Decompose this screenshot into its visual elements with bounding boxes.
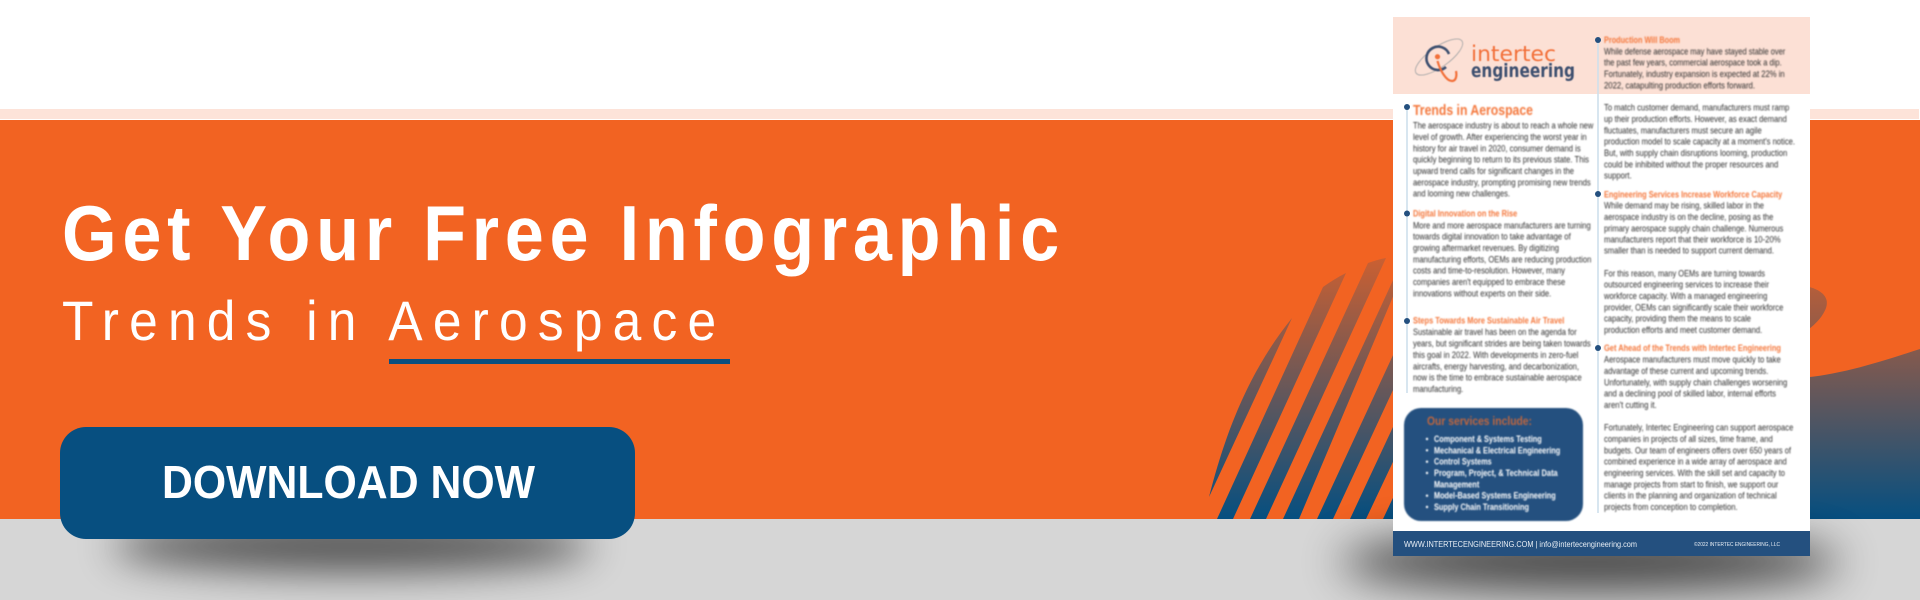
intertec engineering logo: engineering: [1471, 60, 1575, 82]
section: production will boom: the past few years, commercial aerospace took a dip.: [1604, 58, 1782, 68]
section: digital innovation: companies aren't equipped to embrace these: [1413, 277, 1565, 287]
section: engineering services: manufacturers report that their workforce is 10-20%: [1604, 234, 1781, 244]
section: digital innovation: growing aftermarket revenues. By digitizing: [1413, 243, 1559, 253]
section: get ahead: Get Ahead of the Trends with Intertec Engineering: [1604, 343, 1781, 353]
intro paragraph: quickly beginning to return to its previous state. This: [1413, 155, 1589, 165]
section: production will boom: Fortunately, industry expansion is expected at 22% in: [1604, 69, 1785, 79]
services callout box: Supply Chain Transitioning: [1434, 502, 1529, 512]
right side wave graphic: [1800, 285, 1920, 519]
section: sustainable air travel: years, but significant strides are being taken towards: [1413, 338, 1591, 348]
production paragraph: production model to scale capacity at a moment's notice.: [1604, 137, 1795, 147]
intro paragraph: [1413, 121, 1594, 199]
subtitle: Trends in Aerospace: [62, 290, 716, 352]
production paragraph: To match customer demand, manufacturers must ramp: [1604, 103, 1789, 113]
workforce paragraph: [1603, 268, 1783, 335]
download button: [60, 427, 635, 539]
services callout box: Control Systems: [1434, 457, 1492, 467]
document drop shadow: [1340, 534, 1840, 590]
section: get ahead: advantage of these current and upcoming trends.: [1604, 366, 1768, 376]
closing paragraph: engineering services. With the skill set and capacity to: [1604, 468, 1785, 478]
section: get ahead: and a declining pool of skilled labor, internal efforts: [1604, 389, 1776, 399]
intertec engineering logo: [1410, 33, 1575, 82]
closing paragraph: Fortunately, Intertec Engineering can support aerospace: [1604, 423, 1793, 433]
document heading: Trends in Aerospace: [1413, 103, 1533, 119]
intro paragraph: history for air travel in 2020, consumer demand is: [1413, 143, 1581, 153]
services callout box: Program, Project, & Technical Data: [1434, 468, 1559, 478]
production paragraph: could be inhibited without the proper resources and: [1604, 159, 1778, 169]
section: engineering services: primary aerospace supply chain challenge. Numerous: [1604, 223, 1784, 233]
intertec engineering logo: intertec: [1471, 42, 1556, 66]
intro paragraph: aerospace industry, prompting promising new trends: [1413, 177, 1591, 187]
right column timeline: [1595, 37, 1601, 513]
section: production will boom: While defense aerospace may have stayed stable over: [1604, 46, 1785, 56]
production paragraph: up their production efforts. However, as exact demand: [1604, 114, 1787, 124]
services callout box: [1404, 408, 1583, 521]
section: sustainable air travel: manufacturing.: [1413, 384, 1463, 394]
left column timeline: [1404, 104, 1410, 393]
section: sustainable air travel: Sustainable air travel has been on the agenda for: [1413, 327, 1577, 337]
section: production will boom: 2022, catapulting production efforts forward.: [1604, 80, 1755, 90]
workforce paragraph: For this reason, many OEMs are turning towards: [1604, 268, 1765, 278]
intro paragraph: and looming new challenges.: [1413, 189, 1510, 199]
closing paragraph: projects from conception to completion.: [1604, 502, 1738, 512]
closing paragraph: companies in projects of all sizes, time frame, and: [1604, 434, 1773, 444]
section: engineering services: aerospace industry is on the decline, posing as the: [1604, 212, 1773, 222]
section: production will boom: [1604, 35, 1785, 90]
closing paragraph: combined experience in a wide array of aerospace and: [1604, 457, 1787, 467]
section: get ahead: [1604, 343, 1787, 410]
document footer bar: [1393, 531, 1810, 556]
section: engineering services: [1604, 189, 1784, 256]
section: get ahead: Aerospace manufacturers must move quickly to take: [1604, 355, 1781, 365]
intro paragraph: level of growth. After experiencing the worst year in: [1413, 132, 1587, 142]
closing paragraph: clients in the planning and organization of technical: [1604, 491, 1777, 501]
section: get ahead: Unfortunately, with supply chain challenges worsening: [1604, 377, 1787, 387]
document footer bar: ©2022 INTERTEC ENGINEERING, LLC: [1694, 541, 1780, 548]
orange banner background: [0, 120, 1920, 519]
section: engineering services: smaller than is needed to support current demand.: [1604, 246, 1774, 256]
section: digital innovation: innovations without experts on their side.: [1413, 288, 1551, 298]
services callout box: Our services include:: [1427, 414, 1532, 428]
workforce paragraph: outsourced engineering services to increase their: [1604, 280, 1769, 290]
services callout box: Management: [1434, 479, 1479, 489]
production paragraph: [1604, 103, 1795, 181]
section: production will boom: Production Will Boom: [1604, 35, 1680, 45]
intro paragraph: upward trend calls for significant changes in the: [1413, 166, 1574, 176]
document footer bar: WWW.INTERTECENGINEERING.COM | info@intertecengineering.com: [1404, 539, 1637, 549]
diagonal stripe graphic: [1209, 258, 1400, 519]
section: engineering services: While demand may be rising, skilled labor in the: [1604, 201, 1764, 211]
intro paragraph: The aerospace industry is about to reach a whole new: [1413, 121, 1594, 131]
workforce paragraph: workforce capacity. With a managed engineering: [1603, 291, 1767, 301]
infographic document preview: [1393, 17, 1810, 556]
closing paragraph: [1604, 423, 1793, 512]
section: digital innovation: Digital Innovation on the Rise: [1413, 209, 1517, 219]
services callout box: Component & Systems Testing: [1434, 434, 1542, 444]
button drop shadow: [112, 520, 592, 572]
production paragraph: fluctuates, manufacturers must secure an agile: [1604, 125, 1762, 135]
section: sustainable air travel: this goal in 2022. With developments in zero-fuel: [1413, 350, 1578, 360]
workforce paragraph: production efforts and meet customer demand.: [1604, 325, 1762, 335]
section: sustainable air travel: Steps Towards More Sustainable Air Travel: [1413, 316, 1564, 326]
grey floor strip: [0, 519, 1920, 600]
title: Get Your Free Infographic: [62, 190, 1059, 277]
section: digital innovation: manufacturing efforts, OEMs are reducing production: [1413, 254, 1591, 264]
section: sustainable air travel: now is the time to embrace sustainable aerospace: [1413, 373, 1582, 383]
section: sustainable air travel: [1413, 316, 1591, 394]
section: engineering services: Engineering Services Increase Workforce Capacity: [1604, 189, 1783, 199]
closing paragraph: budgets. Our team of engineers offers over 650 years of: [1604, 445, 1791, 455]
subtitle underline: [389, 359, 730, 364]
closing paragraph: manage projects from start to finish, we support our: [1604, 479, 1778, 489]
section: sustainable air travel: aircrafts, energy harvesting, and decarbonization,: [1413, 361, 1579, 371]
workforce paragraph: provider, OEMs can significantly scale their workforce: [1604, 302, 1783, 312]
document header band: [1393, 17, 1810, 94]
pale band above the banner: [0, 109, 1919, 119]
services callout box: Mechanical & Electrical Engineering: [1434, 445, 1560, 455]
section: digital innovation: [1413, 209, 1591, 298]
production paragraph: But, with supply chain disruptions looming, production: [1604, 148, 1787, 158]
download button: DOWNLOAD NOW: [162, 456, 536, 508]
section: digital innovation: towards digital innovation to take advantage of: [1413, 232, 1571, 242]
section: digital innovation: costs and time-to-resolution. However, many: [1413, 266, 1565, 276]
production paragraph: support.: [1604, 171, 1632, 181]
workforce paragraph: capacity, providing them the means to scale: [1604, 314, 1751, 324]
services callout box: Model-Based Systems Engineering: [1434, 491, 1556, 501]
section: digital innovation: More and more aerospace manufacturers are turning: [1413, 220, 1591, 230]
section: get ahead: aren't cutting it.: [1604, 400, 1657, 410]
